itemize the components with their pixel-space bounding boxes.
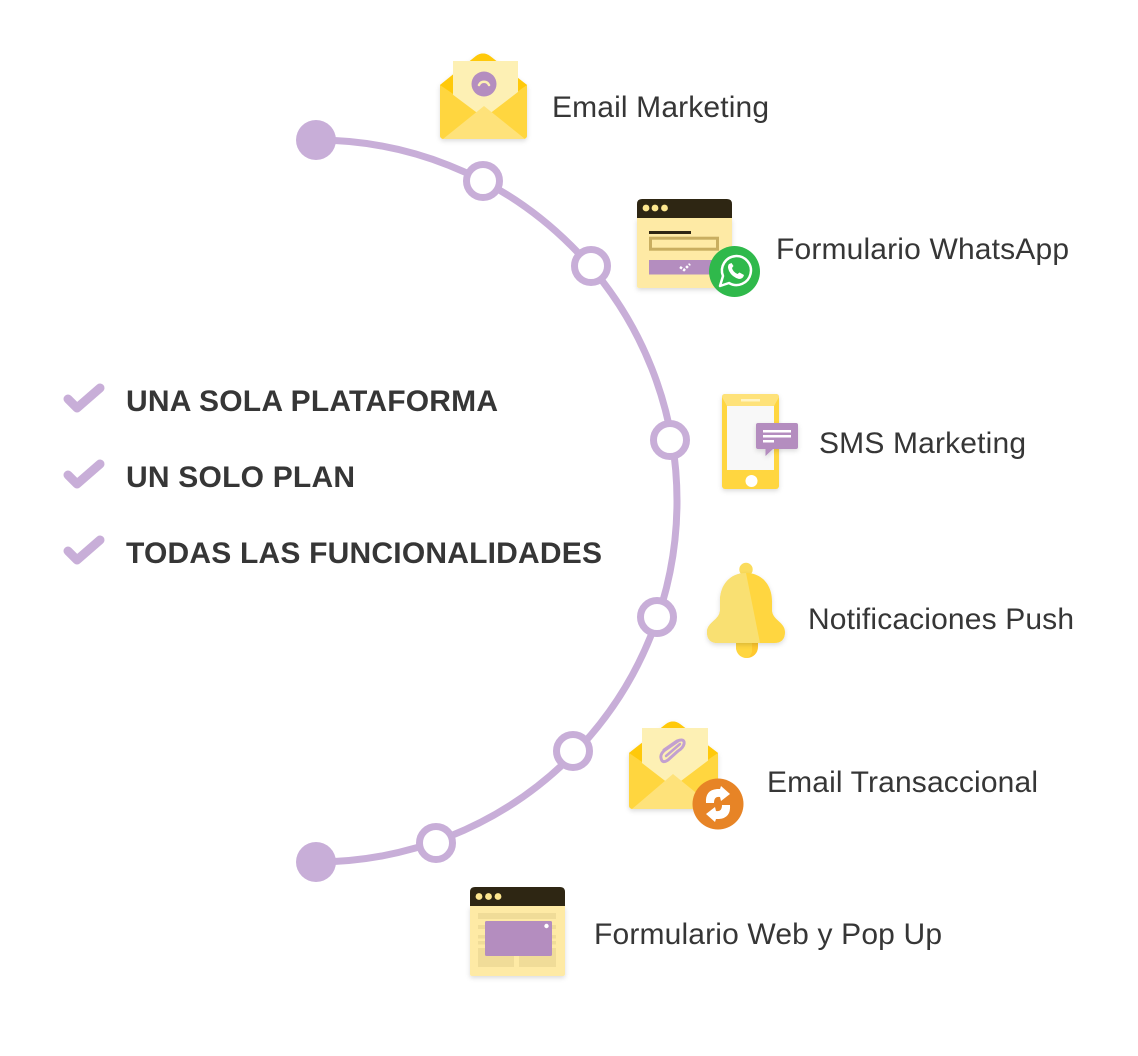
- timeline arc: [296, 120, 686, 882]
- benefit: un solo plan: UN SOLO PLAN: [126, 461, 355, 494]
- icon: email marketing envelope: [440, 54, 527, 139]
- label: notificaciones push: Notificaciones Push: [808, 603, 1074, 636]
- icon: bell: [707, 563, 785, 658]
- icon: whatsapp form: [637, 199, 760, 297]
- label: formulario whatsapp: Formulario WhatsApp: [776, 233, 1069, 266]
- check icon 3: [68, 540, 100, 560]
- benefit: todas las funcionalidades: TODAS LAS FUNCIONALIDADES: [126, 537, 602, 570]
- label: email transaccional: Email Transaccional: [767, 766, 1038, 799]
- icon: sms phone: [722, 394, 798, 489]
- label: formulario web y pop up: Formulario Web y Pop Up: [594, 918, 942, 951]
- check icon 1: [68, 388, 100, 408]
- icon: web form and pop up: [470, 887, 565, 976]
- benefit: una sola plataforma: UNA SOLA PLATAFORMA: [126, 385, 498, 418]
- benefit list: [68, 385, 602, 570]
- icon: transactional email: [629, 722, 744, 830]
- check icon 2: [68, 464, 100, 484]
- label: email marketing: Email Marketing: [552, 91, 769, 124]
- label: sms marketing: SMS Marketing: [819, 427, 1026, 460]
